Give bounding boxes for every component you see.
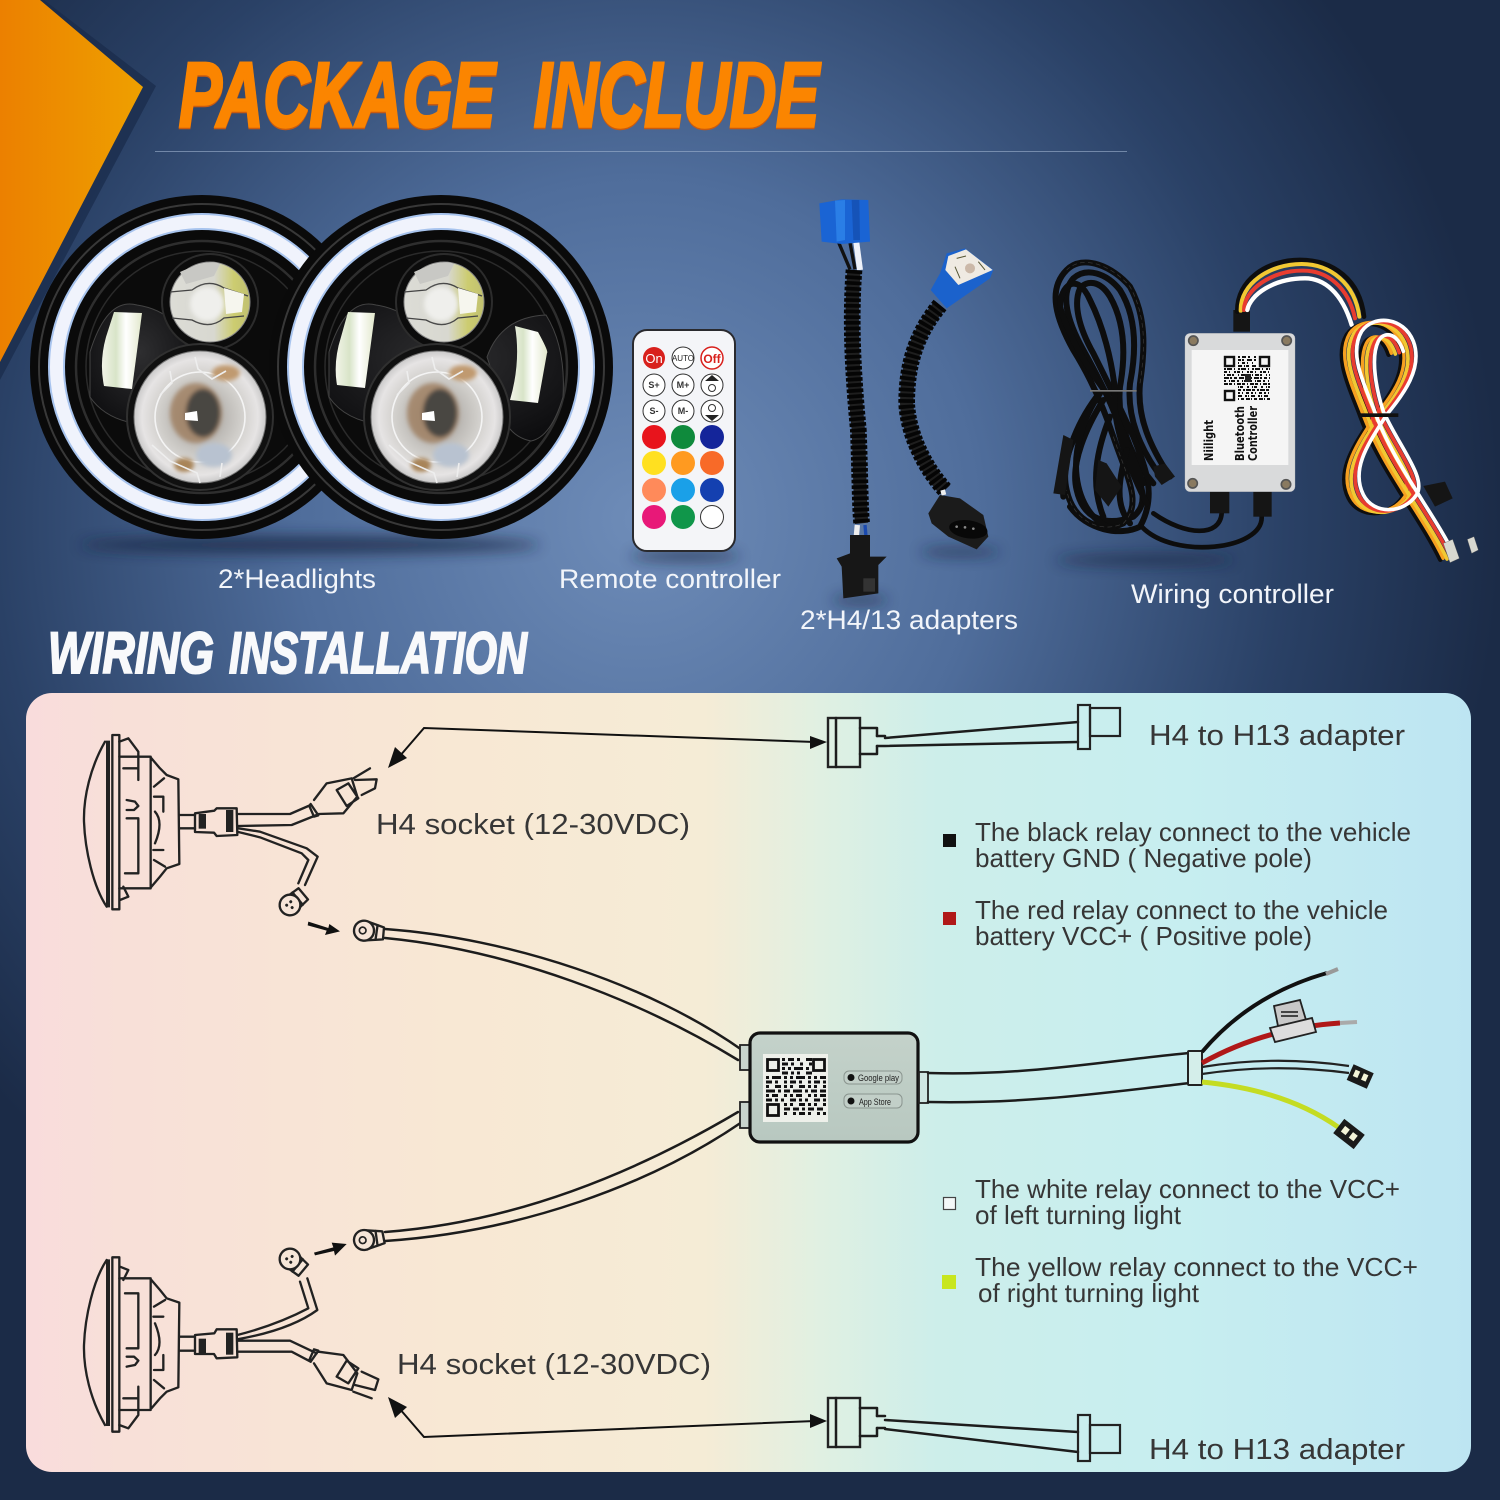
note: white relay — [944, 1174, 1400, 1230]
adapter curved — [907, 248, 993, 549]
wiring controller — [1053, 260, 1478, 563]
red wire — [1202, 1022, 1357, 1063]
white wire — [1202, 1061, 1374, 1089]
bottom lamp: signal lead and connector — [237, 1244, 317, 1339]
bottom lamp: mating connector — [353, 1227, 385, 1251]
remote controller: Off — [703, 352, 722, 366]
black wire — [1202, 969, 1338, 1052]
box label — [1202, 406, 1260, 461]
headlamp bottom — [84, 1227, 385, 1432]
remote controller: M+ — [677, 380, 689, 390]
title: PACKAGE — [179, 44, 497, 145]
wiring controller: black cable coil — [1056, 262, 1262, 547]
headlight right: low-beam lens — [364, 344, 510, 490]
adapter diagram top — [828, 705, 1120, 767]
section heading — [48, 620, 528, 686]
bottom lamp: connect arrow — [314, 1243, 347, 1256]
product labels: 2*Headlights — [218, 564, 376, 594]
label top adapter: H4 to H13 adapter — [1149, 720, 1405, 752]
remote controller: S- — [650, 406, 659, 416]
headlight left: DRL strip — [102, 312, 142, 389]
note: red relay — [943, 895, 1388, 951]
headlight right — [269, 195, 613, 539]
headlight left: DRL pocket — [90, 304, 190, 425]
app store badge: App Store — [859, 1097, 891, 1107]
title: PACKAGE — [179, 45, 497, 147]
headlamp top — [84, 735, 385, 943]
title: INCLUDE — [534, 45, 821, 147]
remote controller: On — [645, 351, 663, 366]
note: black relay — [943, 817, 1411, 873]
top lamp: connect arrow — [308, 922, 340, 935]
headlight left: low-beam lens — [127, 344, 273, 490]
product labels: Wiring controller — [1131, 579, 1334, 609]
headlight left: high-beam lens — [162, 254, 258, 350]
yellow wire — [1202, 1082, 1365, 1149]
box QR code — [1224, 357, 1270, 400]
output cable — [928, 1053, 1190, 1102]
google play badge: Google play — [858, 1073, 899, 1083]
top lamp: signal lead and connector — [238, 828, 318, 920]
headlight right: DRL strips — [336, 312, 547, 403]
section heading: WIRING — [48, 620, 214, 686]
wiring controller: ties and terminals — [1360, 413, 1478, 563]
corner arrow shape — [0, 0, 156, 380]
remote controller: M- — [678, 406, 688, 416]
arrow top — [388, 728, 827, 768]
arrow bottom — [388, 1397, 827, 1437]
wiring controller: coloured wires — [1237, 260, 1455, 560]
panel: wiring diagram — [26, 693, 1471, 1472]
top lamp: mating connector — [353, 919, 385, 943]
wiring controller: box — [1185, 333, 1295, 492]
note: red relay: battery VCC+ ( Positive pole) — [975, 921, 1312, 951]
wiring controller: plugs — [1053, 310, 1272, 517]
remote controller: AUTO — [672, 354, 694, 363]
product labels: Remote controller — [559, 564, 781, 594]
main cable top — [385, 929, 742, 1060]
google play badge — [844, 1071, 902, 1084]
product shadows — [80, 536, 1235, 604]
app store badge — [844, 1094, 902, 1108]
note: yellow relay: The yellow relay connect to the VCC+ — [975, 1252, 1418, 1282]
remote controller: S+ — [648, 380, 660, 390]
box label: Controller — [1246, 406, 1260, 461]
box label: Niilight — [1202, 420, 1216, 461]
note: yellow relay — [942, 1252, 1418, 1308]
section heading: INSTALLATION — [229, 620, 528, 686]
title — [179, 44, 821, 147]
label bottom socket: H4 socket (12-30VDC) — [397, 1349, 711, 1381]
controller unit — [740, 1033, 928, 1142]
note: white relay: The white relay connect to the VCC+ — [975, 1174, 1400, 1204]
note: black relay: The black relay connect to the vehicle — [975, 817, 1411, 847]
headlight right: DRL pockets — [329, 304, 563, 441]
fuse holder — [1270, 1000, 1316, 1042]
controller QR code — [763, 1054, 828, 1122]
title: INCLUDE — [534, 44, 821, 145]
headlight left — [30, 195, 374, 539]
bottom lamp: H4 socket lead — [179, 1329, 378, 1398]
label top socket: H4 socket (12-30VDC) — [376, 809, 690, 841]
title divider — [155, 151, 1127, 152]
top lamp: H4 socket lead — [179, 768, 377, 836]
adapter diagram bottom — [828, 1398, 1120, 1461]
headlight right: high-beam lens — [396, 254, 492, 350]
box label: Bluetooth — [1233, 406, 1247, 461]
note: yellow relay: of right turning light — [978, 1278, 1200, 1308]
note: black relay: battery GND ( Negative pole) — [975, 843, 1312, 873]
note: white relay: of left turning light — [975, 1200, 1182, 1230]
remote controller — [633, 330, 735, 551]
main cable bottom — [385, 1112, 742, 1241]
note: red relay: The red relay connect to the vehicle — [975, 895, 1388, 925]
product labels: 2*H4/13 adapters — [800, 605, 1018, 635]
product labels — [218, 564, 1334, 635]
output collar — [1188, 1051, 1202, 1085]
label bottom adapter: H4 to H13 adapter — [1149, 1434, 1405, 1466]
adapter straight — [819, 199, 887, 598]
